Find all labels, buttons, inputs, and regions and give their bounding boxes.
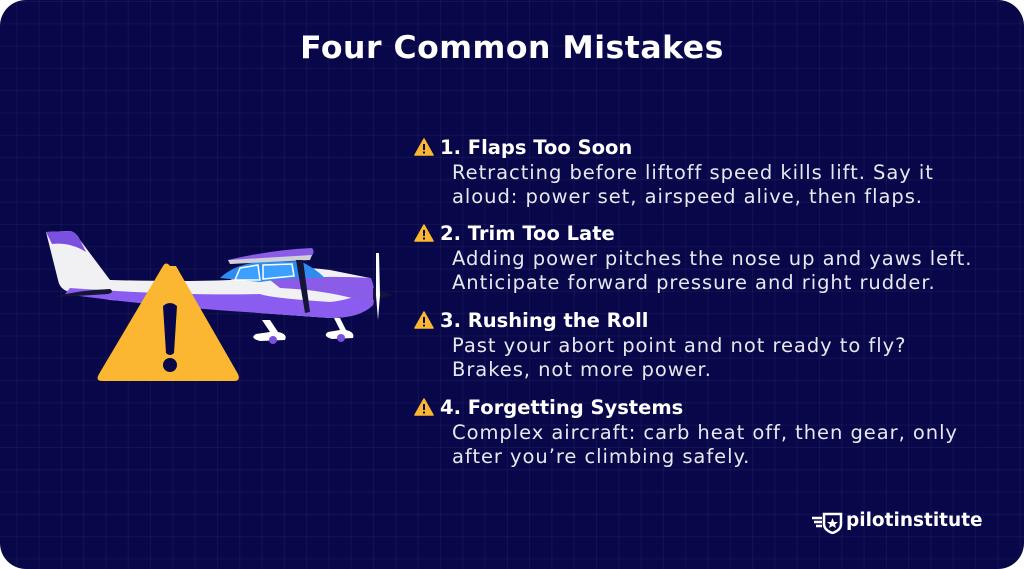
item 2: Anticipate forward pressure and right rudder. xyxy=(452,271,936,294)
item 2 xyxy=(414,222,972,294)
item 1 xyxy=(414,136,934,208)
heading 2: 2. Trim Too Late xyxy=(440,222,615,245)
logo: pilotinstitute xyxy=(846,510,983,531)
heading 4: 4. Forgetting Systems xyxy=(440,396,683,419)
item 2: Adding power pitches the nose up and yaws left. xyxy=(452,247,972,270)
item 3: Past your abort point and not ready to fly? xyxy=(452,334,906,357)
icon: warning triangle xyxy=(98,264,239,381)
item 4: after you’re climbing safely. xyxy=(452,445,750,468)
item 4 xyxy=(414,396,958,468)
heading 1: 1. Flaps Too Soon xyxy=(440,136,632,159)
plane xyxy=(46,231,393,344)
item 3: Brakes, not more power. xyxy=(452,358,712,381)
item 4: Complex aircraft: carb heat off, then gear, only xyxy=(452,421,958,444)
item 1: Retracting before liftoff speed kills lift. Say it xyxy=(452,161,934,184)
item 1: aloud: power set, airspeed alive, then flaps. xyxy=(452,185,923,208)
heading 3: 3. Rushing the Roll xyxy=(440,309,648,332)
title: Four Common Mistakes xyxy=(300,30,724,66)
item 3 xyxy=(414,309,906,381)
illustration: plane with warning xyxy=(46,231,392,381)
